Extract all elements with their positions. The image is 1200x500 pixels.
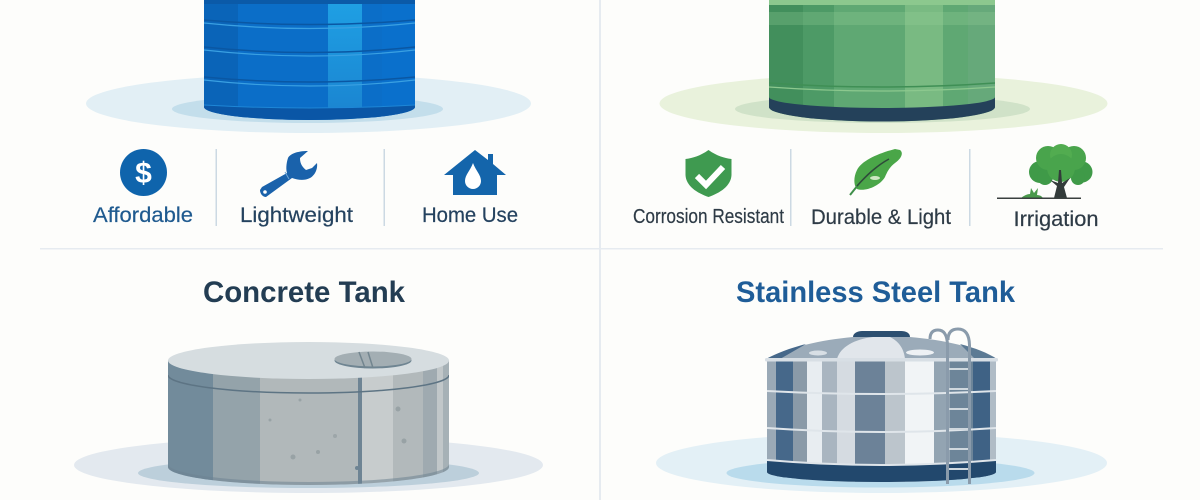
icon: shield with check xyxy=(686,150,732,197)
steel tank xyxy=(765,329,998,490)
label: corrosion resistant: Corrosion Resistant xyxy=(633,206,784,228)
feature: affordable xyxy=(93,149,193,227)
panel: plastic tank xyxy=(86,0,531,227)
icon: tree xyxy=(997,144,1092,199)
label: durable and light: Durable & Light xyxy=(811,206,951,229)
icon: house with water drop xyxy=(444,150,506,195)
ground shadow: steel tank xyxy=(656,433,1107,493)
ground shadow: concrete tank xyxy=(74,437,543,493)
dome roof xyxy=(765,331,998,362)
label: affordable: Affordable xyxy=(93,204,193,227)
blue tank xyxy=(204,0,415,125)
panel: concrete tank xyxy=(74,276,543,493)
heading: stainless steel tank: Stainless Steel Tank xyxy=(736,276,1015,309)
hatch lid xyxy=(334,352,412,368)
heading: concrete tank: Concrete Tank xyxy=(203,276,405,309)
label: lightweight: Lightweight xyxy=(240,204,353,227)
ladder xyxy=(930,329,970,484)
green tank xyxy=(769,0,995,125)
icon: wrench xyxy=(260,151,317,197)
concrete tank xyxy=(168,342,449,490)
feature: home use xyxy=(422,150,518,227)
ground shadow: blue tank xyxy=(86,74,531,133)
icon: dollar coin: $ xyxy=(135,157,152,190)
panel: stainless steel tank xyxy=(656,276,1107,493)
label: irrigation: Irrigation xyxy=(1014,208,1098,231)
feature: lightweight xyxy=(240,151,353,227)
icon: leaf xyxy=(850,149,902,195)
panel: fiberglass tank xyxy=(633,0,1108,231)
feature: corrosion resistant xyxy=(633,150,784,228)
label: home use: Home Use xyxy=(422,204,518,227)
ground shadow: green tank xyxy=(660,74,1108,133)
feature: durable and light xyxy=(811,149,951,229)
feature: irrigation xyxy=(997,144,1098,231)
